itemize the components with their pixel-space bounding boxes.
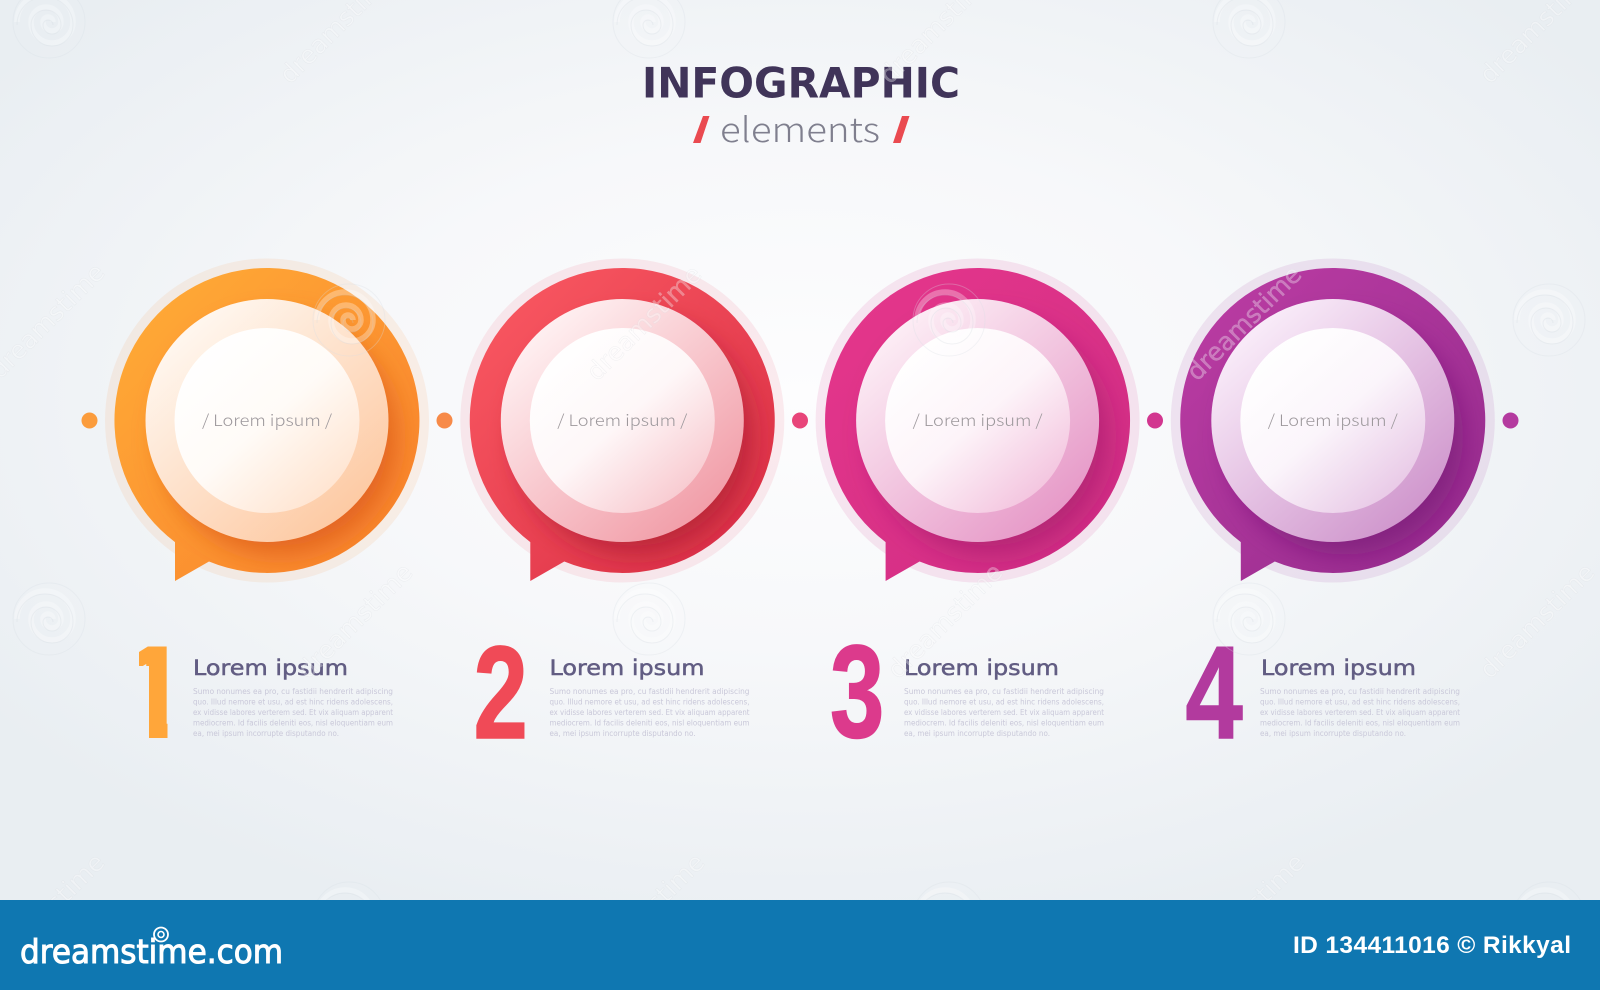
outer disc xyxy=(501,299,744,542)
inner disc xyxy=(885,328,1070,513)
shadow xyxy=(872,318,1108,554)
inner disc xyxy=(1240,328,1425,513)
step 3 text: ea, mei ipsum incorrupte disputando no. xyxy=(904,729,1050,738)
step 1 text: mediocrem. Id facilis deleniti eos, nisl eloquentiam eum xyxy=(193,718,393,728)
step 4 number: 4 xyxy=(1186,620,1243,767)
watermark text: dreamstime xyxy=(581,260,707,386)
step 2 text: ea, mei ipsum incorrupte disputando no. xyxy=(550,729,696,738)
shadow xyxy=(161,318,397,554)
step 3 number: 3 xyxy=(830,618,884,765)
watermark text: dreamstime xyxy=(1184,848,1310,974)
step 2 text: ex vidisse labores verterem sed. Et vix aliquam apparent xyxy=(550,708,750,717)
label: / Lorem ipsum / xyxy=(913,407,1043,431)
step 4 text: Lorem ipsum xyxy=(1261,656,1416,680)
label: / Lorem ipsum / xyxy=(1268,407,1399,431)
halo xyxy=(105,258,429,582)
subtitle: elements xyxy=(693,103,910,152)
step 3 text: quo. Illud nemore et usu, ad est hinc ridens adolescens, xyxy=(904,698,1104,706)
icon: logo spiral xyxy=(154,928,168,942)
step 4 speech bubble xyxy=(1171,258,1495,582)
step 3 text: ex vidisse labores verterem sed. Et vix aliquam apparent xyxy=(904,708,1104,717)
footer credit: ID 134411016 © Rikkyal xyxy=(1293,932,1571,959)
step 1 text: ea, mei ipsum incorrupte disputando no. xyxy=(193,729,339,738)
step 3 text: Lorem ipsum xyxy=(904,656,1059,680)
watermark text: dreamstime xyxy=(292,558,418,684)
step 1 number: 1 xyxy=(115,618,191,766)
watermark text: dreamstime xyxy=(1474,558,1600,684)
halo xyxy=(816,258,1140,582)
step 2 speech bubble xyxy=(460,258,784,582)
watermark text: dreamstime xyxy=(1181,260,1307,386)
step 1 text: ex vidisse labores verterem sed. Et vix aliquam apparent xyxy=(193,708,393,717)
ring xyxy=(825,268,1130,581)
label: / Lorem ipsum / xyxy=(557,407,688,431)
step 1 text xyxy=(193,656,393,738)
watermark spirals xyxy=(36,0,1564,676)
step 4 text: quo. Illud nemore et usu, ad est hinc ridens adolescens, xyxy=(1260,698,1460,706)
outer disc xyxy=(146,299,388,542)
halo xyxy=(460,258,784,582)
connector dots xyxy=(82,412,1518,428)
step 2 text: mediocrem. Id facilis deleniti eos, nisl eloquentiam eum xyxy=(550,718,750,728)
step 2 text: Lorem ipsum xyxy=(550,656,704,680)
title: INFOGRAPHIC xyxy=(642,58,960,108)
step 4 text: ex vidisse labores verterem sed. Et vix aliquam apparent xyxy=(1260,708,1460,717)
step 1 text: Lorem ipsum xyxy=(193,656,348,680)
step 2 text xyxy=(550,656,750,738)
watermark text: dreamstime xyxy=(584,848,710,974)
inner disc xyxy=(530,328,715,513)
step 4 text xyxy=(1260,656,1460,738)
step 1 speech bubble xyxy=(105,258,429,582)
label: / Lorem ipsum / xyxy=(202,407,333,431)
shadow xyxy=(1227,318,1463,554)
halo xyxy=(1171,258,1495,582)
subtitle: elements: elements xyxy=(720,103,880,152)
step 4 text: ea, mei ipsum incorrupte disputando no. xyxy=(1260,729,1406,738)
ring xyxy=(114,268,419,581)
shadow xyxy=(516,318,752,554)
step 4 text: mediocrem. Id facilis deleniti eos, nisl eloquentiam eum xyxy=(1260,718,1460,728)
outer disc xyxy=(1211,299,1454,542)
step 2 number: 2 xyxy=(474,619,528,766)
step 3 text: mediocrem. Id facilis deleniti eos, nisl eloquentiam eum xyxy=(904,718,1104,728)
footer logo: dreamstime.com xyxy=(20,932,283,971)
ring xyxy=(470,268,775,581)
step 3 speech bubble xyxy=(816,258,1140,582)
step 3 text xyxy=(904,656,1104,738)
step 2 text: Sumo nonumes ea pro, cu fastidii hendrerit adipiscing xyxy=(550,687,750,696)
inner disc xyxy=(174,328,360,513)
step 4 text: Sumo nonumes ea pro, cu fastidii hendrerit adipiscing xyxy=(1260,687,1460,696)
step 1 text: quo. Illud nemore et usu, ad est hinc ridens adolescens, xyxy=(193,698,393,706)
step 3 text: Sumo nonumes ea pro, cu fastidii hendrerit adipiscing xyxy=(904,687,1104,696)
step 2 text: quo. Illud nemore et usu, ad est hinc ridens adolescens, xyxy=(550,698,750,706)
footer bar xyxy=(0,900,1600,990)
watermark text: dreamstime xyxy=(882,558,1008,684)
outer disc xyxy=(856,299,1099,542)
ring xyxy=(1180,268,1485,581)
step 1 text: Sumo nonumes ea pro, cu fastidii hendrerit adipiscing xyxy=(193,687,393,696)
